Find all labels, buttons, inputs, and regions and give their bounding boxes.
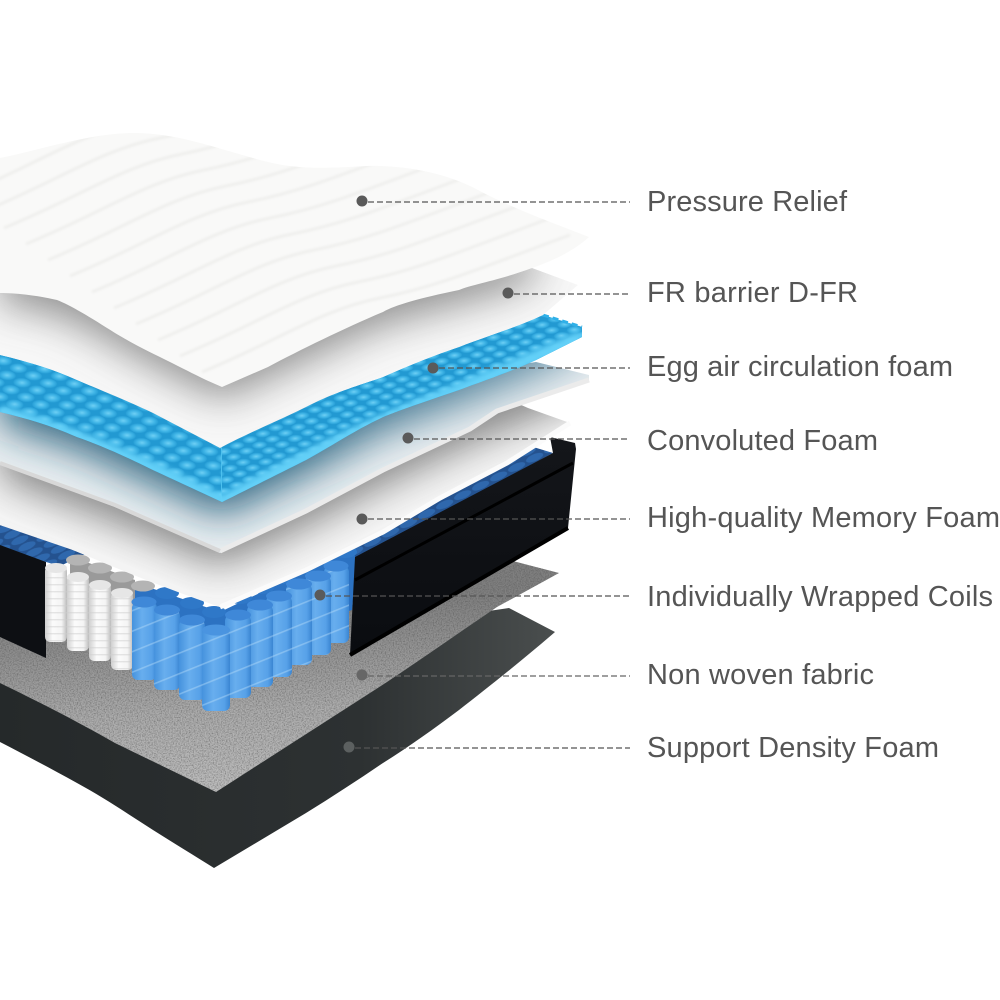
mattress: right black side panel xyxy=(350,437,576,655)
label: Egg air circulation foam: Egg air circulation foam xyxy=(647,351,953,383)
label: FR barrier D-FR: FR barrier D-FR xyxy=(647,277,858,309)
callout: pressure relief leader xyxy=(356,196,630,206)
label: Convoluted Foam: Convoluted Foam xyxy=(647,425,878,457)
layer: non woven fabric xyxy=(0,560,559,792)
label: Support Density Foam: Support Density Foam xyxy=(647,732,939,764)
layer: pressure relief quilted top xyxy=(0,135,572,387)
callout: convoluted foam leader xyxy=(402,432,630,444)
callout: FR barrier leader xyxy=(502,288,630,298)
layer: egg air circulation foam xyxy=(0,314,582,502)
layer: FR barrier xyxy=(0,268,575,448)
mattress: left black side panel xyxy=(0,540,46,658)
callout: support foam leader xyxy=(344,742,630,752)
blue coils: right row xyxy=(225,560,349,698)
label: Pressure Relief: Pressure Relief xyxy=(647,186,848,218)
white coils xyxy=(45,563,133,670)
callout: coils leader xyxy=(314,590,630,600)
callout: non woven fabric leader xyxy=(356,670,630,680)
callout: memory foam leader xyxy=(356,514,630,524)
callout: egg foam leader xyxy=(428,362,630,374)
label: Individually Wrapped Coils: Individually Wrapped Coils xyxy=(647,581,993,613)
label: Non woven fabric: Non woven fabric xyxy=(647,659,874,691)
layer: convoluted foam xyxy=(0,362,590,554)
layer: support density foam xyxy=(0,608,555,868)
layer: high-quality memory foam xyxy=(0,405,567,610)
coil tops behind the foam xyxy=(0,446,553,650)
label: High-quality Memory Foam: High-quality Memory Foam xyxy=(647,502,1000,534)
blue coils: front row xyxy=(132,596,230,711)
